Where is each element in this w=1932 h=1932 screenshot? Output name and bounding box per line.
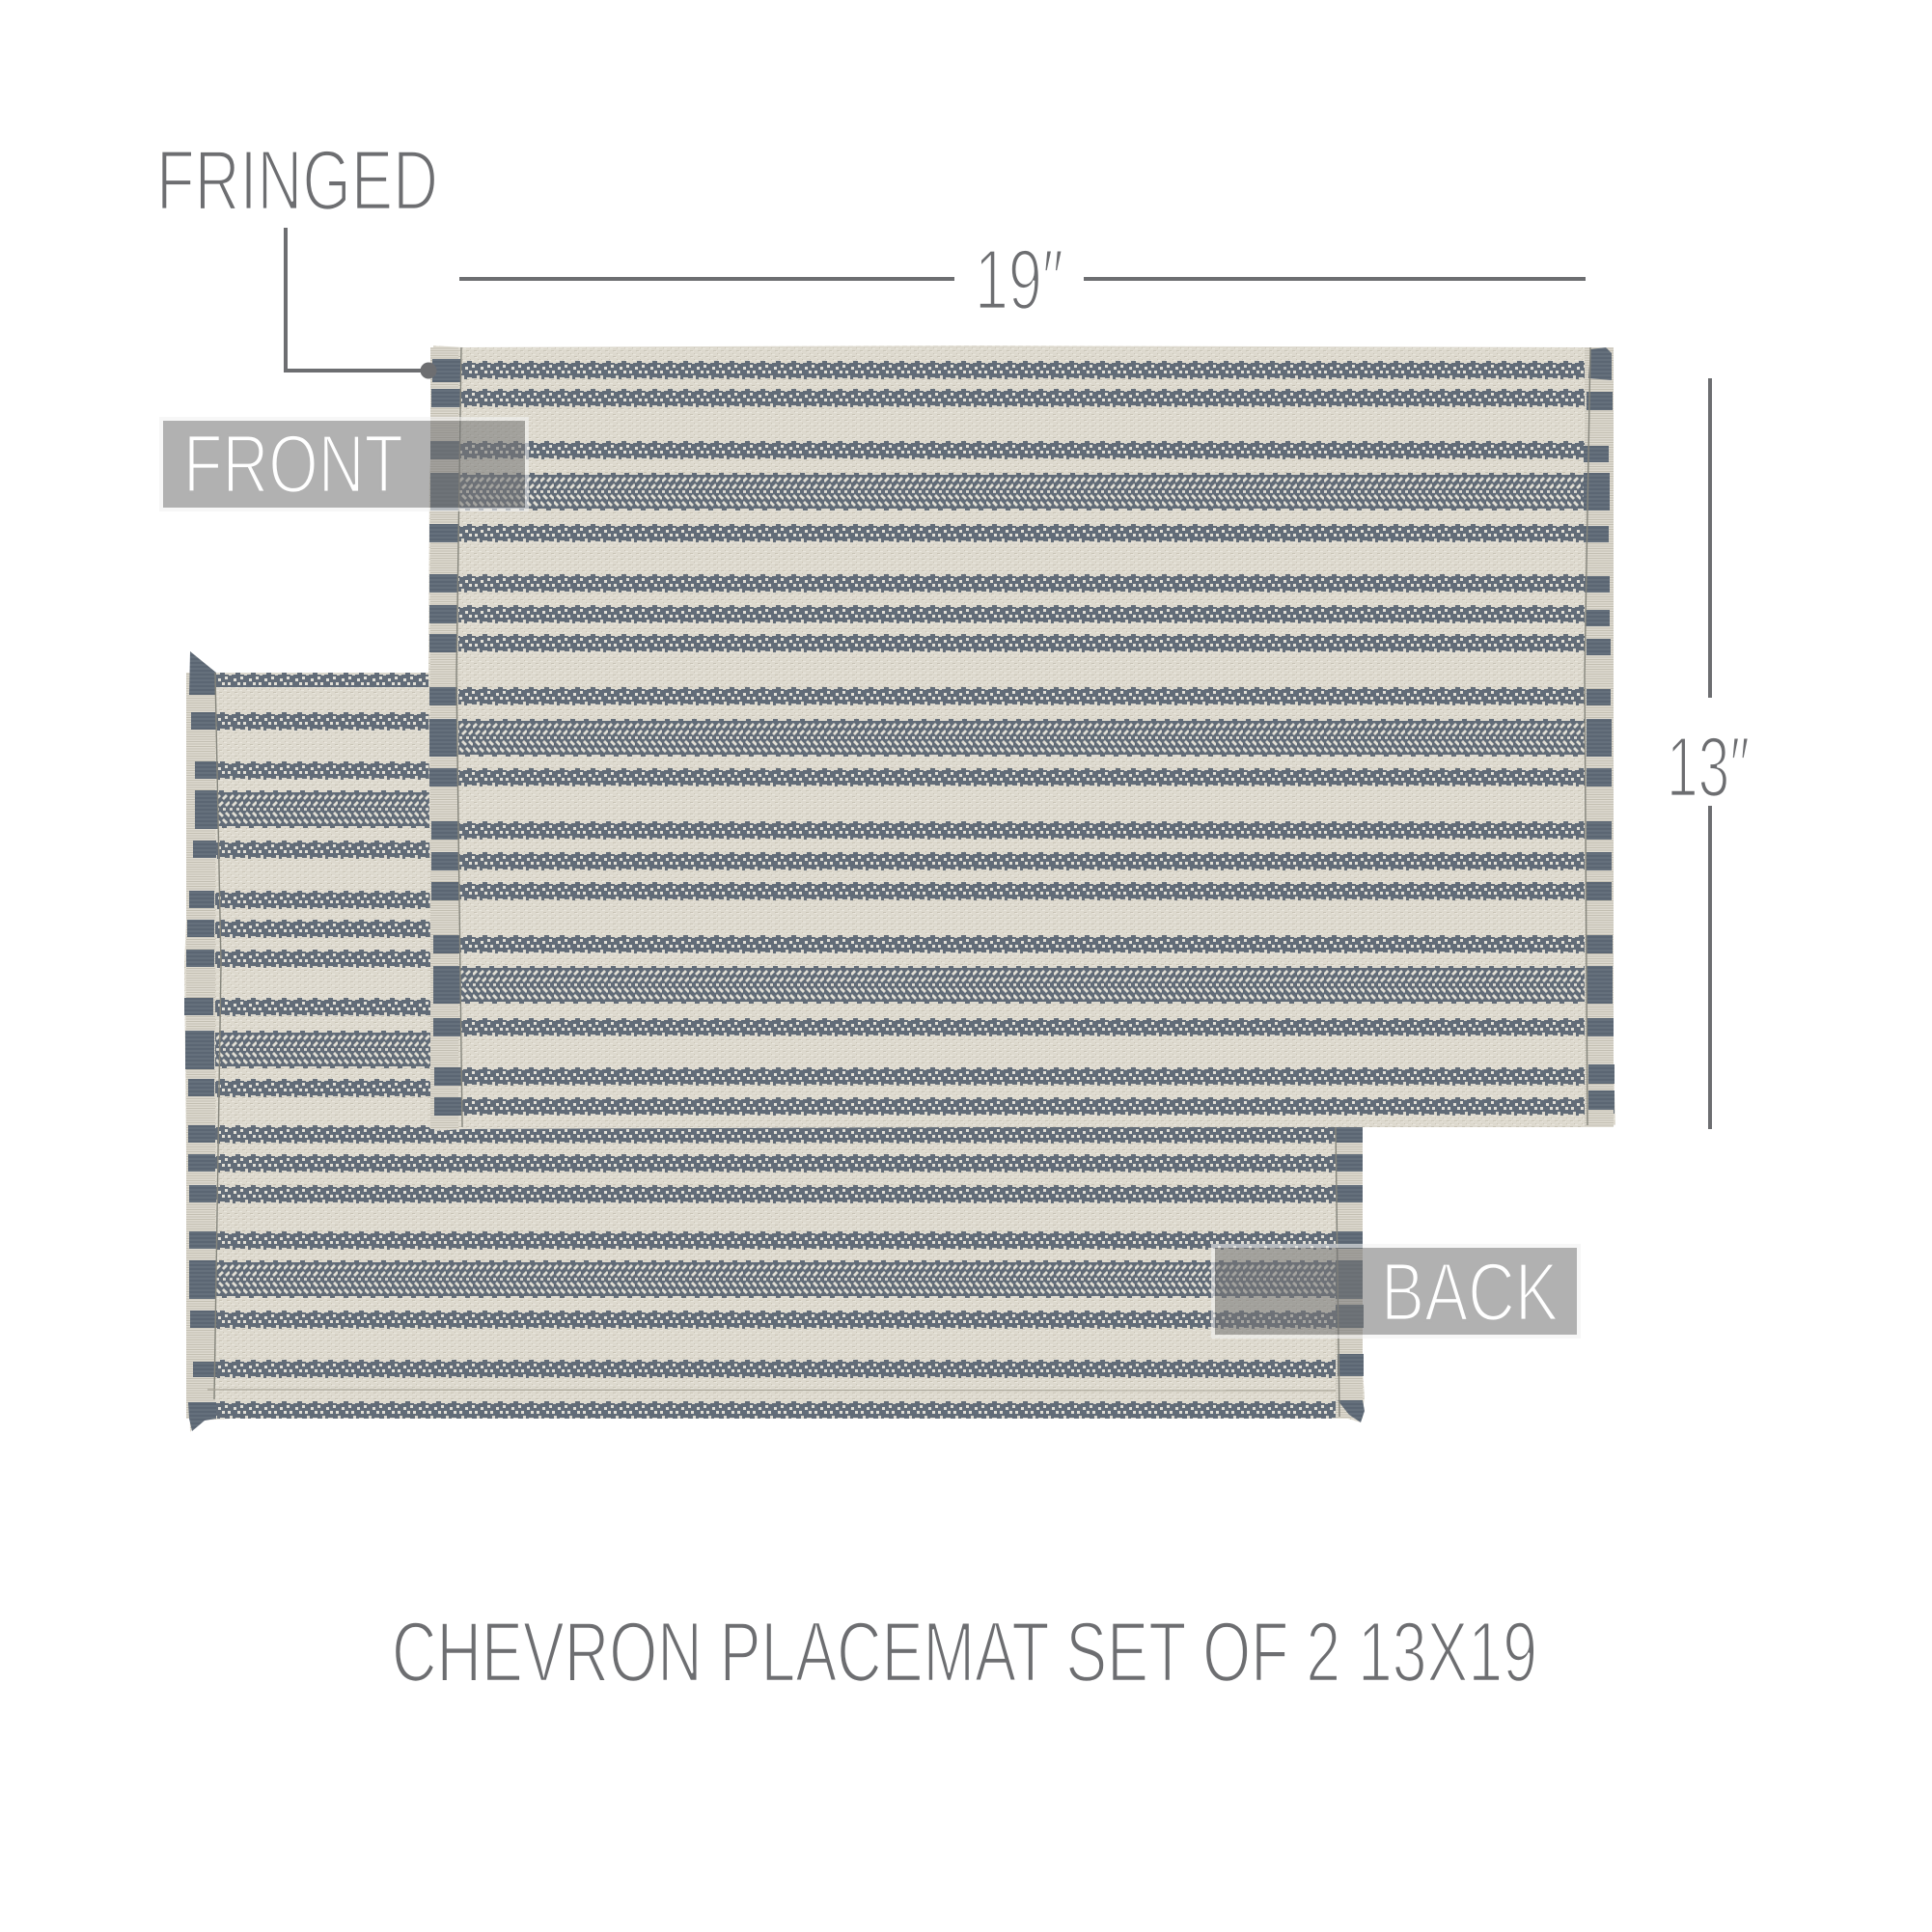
callout: fringed label: FRINGED: [156, 132, 438, 228]
back mat woven stripes: [190, 673, 1363, 1419]
front mat right fringe: [1584, 347, 1615, 1127]
tag: back: BACK: [1381, 1247, 1559, 1339]
front mat fabric: [428, 345, 1615, 1131]
back mat right fringe: [1336, 1125, 1365, 1422]
front mat woven stripes: [431, 361, 1615, 1116]
placemat: front: [428, 345, 1615, 1131]
dimension: width 19 inches: 19″: [975, 232, 1063, 327]
product title: CHEVRON PLACEMAT SET OF 2 13X19: [392, 1604, 1537, 1699]
dimension: height 13 inches: 13″: [1667, 719, 1750, 814]
back mat left fringe: [184, 651, 1341, 1431]
front mat left fringe: [429, 347, 462, 1129]
tag: back: [1213, 1246, 1579, 1339]
tag: front: FRONT: [183, 419, 403, 511]
back mat fabric: [184, 651, 1365, 1432]
placemat: back: [184, 651, 1365, 1432]
callout leader line with dot: [286, 228, 436, 378]
